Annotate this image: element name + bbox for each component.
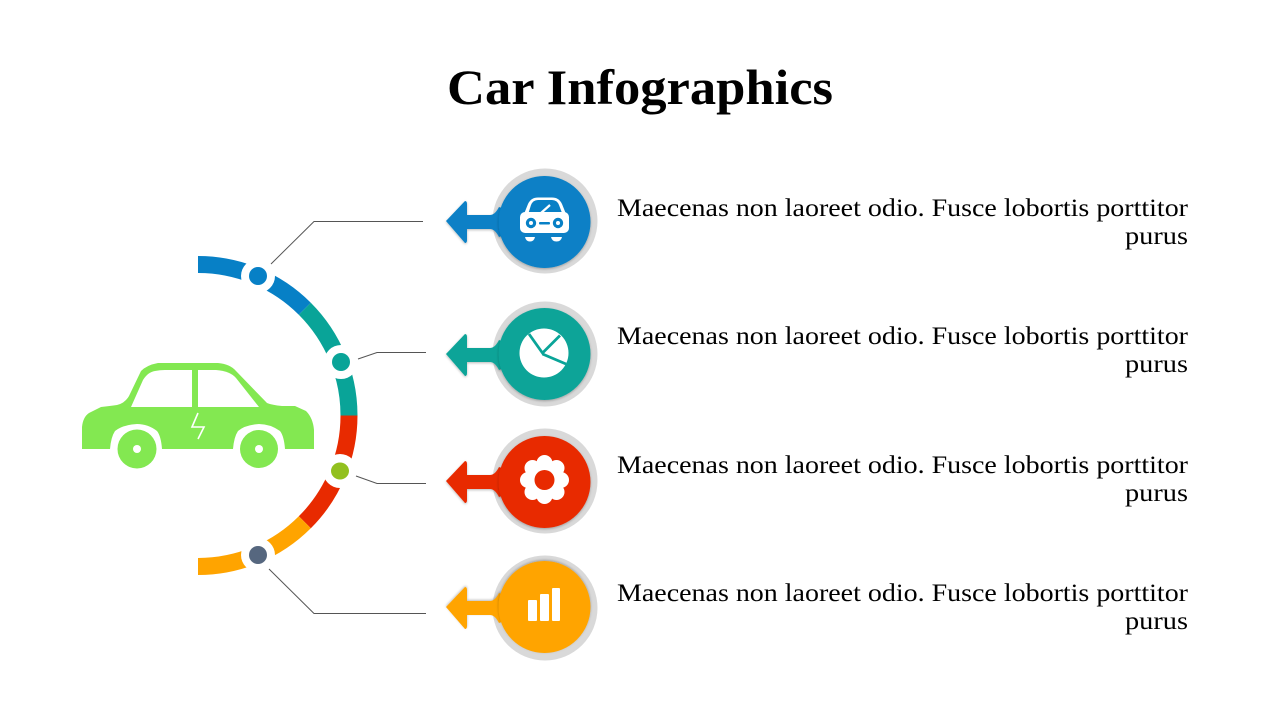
icon: flower — [520, 455, 569, 504]
title: Car Infographics — [447, 59, 833, 115]
row 2 text — [617, 323, 1189, 378]
segmented arc — [198, 264, 349, 566]
row 3 text: purus — [1125, 480, 1188, 507]
row 4 text: Maecenas non laoreet odio. Fusce lobortis porttitor — [617, 580, 1189, 607]
row 4 text — [617, 580, 1189, 635]
leader lines — [269, 222, 426, 614]
arc marker: green — [323, 454, 357, 488]
row 1 text — [617, 195, 1189, 250]
row 1 text: Maecenas non laoreet odio. Fusce lobortis porttitor — [617, 195, 1189, 222]
arc marker: slate — [241, 538, 275, 572]
row 3 badge: red flower — [446, 428, 598, 534]
row 1 badge: blue car — [446, 168, 598, 274]
row 3 text — [617, 452, 1189, 507]
arc marker: blue — [241, 259, 275, 293]
row 2 badge: teal pie — [446, 302, 598, 406]
row 2 text: Maecenas non laoreet odio. Fusce lobortis porttitor — [617, 323, 1189, 350]
car illustration — [82, 363, 314, 468]
row 4 badge: orange bars — [446, 556, 598, 660]
row 1 text: purus — [1125, 223, 1188, 250]
row 4 text: purus — [1125, 608, 1188, 635]
icon: pie chart — [520, 328, 568, 378]
icon: front of car — [520, 198, 569, 242]
icon: bar chart — [528, 588, 560, 621]
row 3 text: Maecenas non laoreet odio. Fusce lobortis porttitor — [617, 452, 1189, 479]
row 2 text: purus — [1125, 351, 1188, 378]
arc marker: teal — [324, 345, 358, 379]
